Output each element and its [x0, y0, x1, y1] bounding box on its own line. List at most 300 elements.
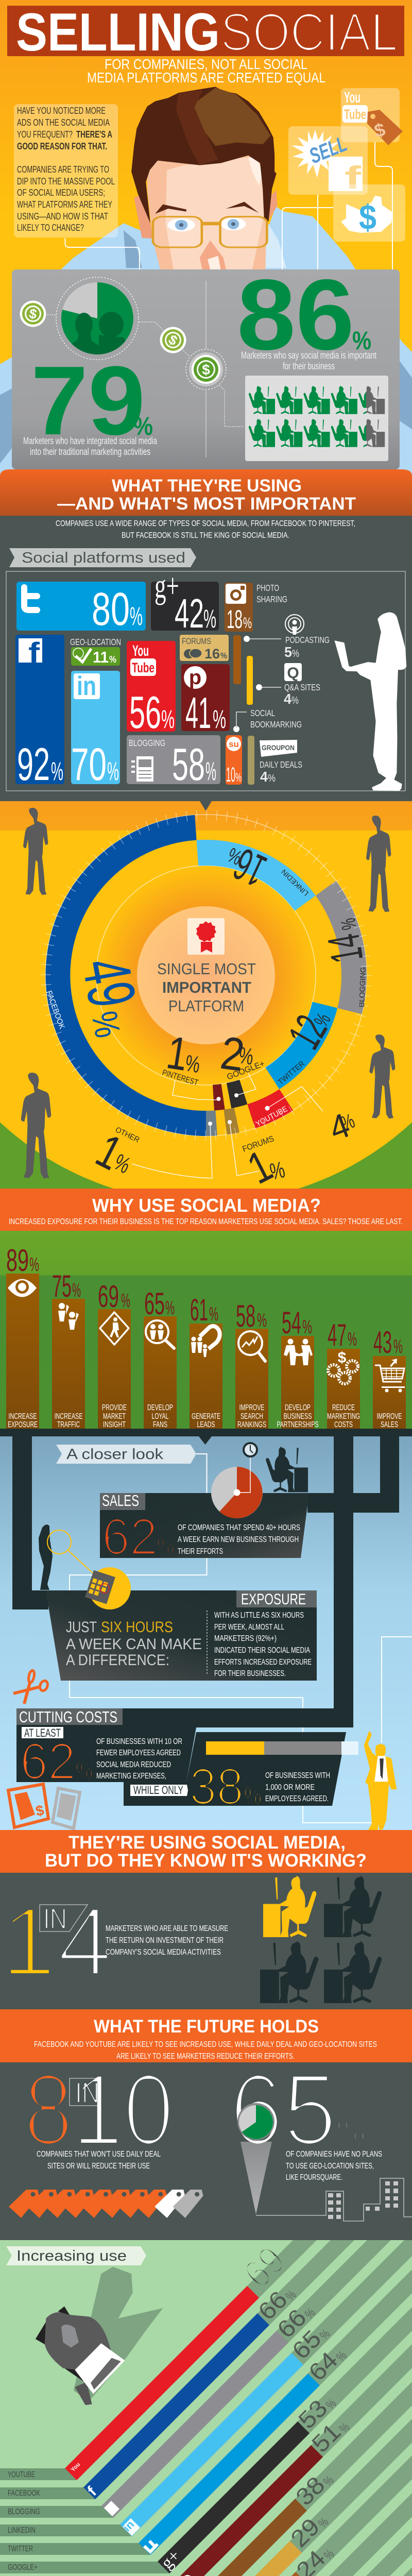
- text: sales: OF COMPANIES THAT SPEND 40+ HOURS: [178, 1523, 300, 1532]
- icon: YouTube price tag: Tube: [344, 107, 366, 122]
- value: forums 1 percent: %: [267, 1156, 287, 1185]
- stat: 86 percent: %: [352, 326, 371, 355]
- headline: six hours: SIX HOURS: [101, 1619, 173, 1636]
- row: Pinterest 51 percent: %: [336, 2420, 353, 2436]
- bar: increase traffic 75 percent: [52, 1269, 85, 1429]
- stat: 62 percent small businesses: 62: [20, 1733, 76, 1790]
- tile: Facebook: [15, 635, 64, 790]
- value: Facebook 49 percent: %: [84, 1008, 128, 1041]
- text: large businesses: EMPLOYEES AGREED.: [265, 1794, 329, 1803]
- text: geo-location: [286, 2150, 382, 2182]
- value: Google plus 2 percent: [217, 1027, 266, 1082]
- row: Twitter 64 percent: [0, 2346, 350, 2555]
- stat: 8 in 10: [24, 2053, 174, 2166]
- value: LinkedIn 16 percent: 16: [226, 839, 273, 897]
- row: YouTube 69 percent: %: [278, 2238, 304, 2264]
- row: Twitter 64 percent: 64: [303, 2346, 343, 2386]
- panel: cutting costs: [16, 1708, 353, 1790]
- row: Facebook 66 percent: f: [84, 2483, 100, 2499]
- icon: coin centre: [186, 349, 226, 389]
- tile: Facebook: %: [51, 757, 63, 786]
- text: return on investment: MARKETERS WHO ARE ABLE TO MEASURE: [106, 1924, 228, 1933]
- value: other 1 percent: OTHER: [114, 1125, 141, 1145]
- section header: what they're using: [0, 469, 412, 516]
- section header: what they're using: —AND WHAT'S MOST IMPORTANT: [57, 494, 356, 514]
- chart: platform increase bars: [0, 2237, 365, 2576]
- section header: are they measuring: THEY'RE USING SOCIAL MEDIA,: [68, 1833, 346, 1853]
- panel: large businesses: [124, 1732, 358, 1816]
- callout: social bookmarking: [233, 708, 302, 732]
- value: other 1 percent: %: [110, 1148, 135, 1179]
- value: blogging 14 percent: %: [337, 917, 361, 931]
- segment: Google plus: [227, 1080, 247, 1108]
- bar: increase exposure 89 percent: 89: [6, 1243, 29, 1278]
- bar: loyal fans 65 percent: LOYAL: [151, 1412, 169, 1421]
- text: exposure: WITH AS LITTLE AS SIX HOURS: [214, 1611, 304, 1620]
- icon: YouTube price tag: [341, 88, 403, 145]
- panel: exposure: [46, 1567, 317, 1681]
- value: other 1 percent: 1: [88, 1124, 130, 1180]
- bar: search rankings 58 percent: RANKINGS: [237, 1420, 266, 1429]
- value: Twitter 12 percent: %: [310, 1009, 335, 1030]
- stat: 62 percent small businesses: %: [76, 1757, 93, 1785]
- stat: 86 percent: 86: [237, 259, 354, 371]
- callout: podcasting: %: [292, 648, 299, 659]
- tile: YouTube: You: [132, 642, 149, 659]
- tile: LinkedIn: in: [77, 671, 96, 701]
- tile: geo-location: GEO-LOCATION: [70, 637, 121, 647]
- connector lines: intro: [65, 142, 392, 269]
- silhouette: woman with laptop: [334, 612, 406, 791]
- value: Twitter 12 percent: [277, 1007, 337, 1087]
- tile: Twitter: 80: [92, 584, 130, 635]
- tile: Google plus: %: [203, 604, 216, 633]
- bar: search rankings 58 percent: 58: [236, 1299, 255, 1333]
- callout: Q and A sites: Q: [287, 665, 299, 682]
- tile: Pinterest: p: [189, 666, 201, 689]
- pictogram: one in four marketers: [260, 1876, 382, 2003]
- tile: blogging: BLOGGING: [129, 738, 165, 748]
- tile: YouTube: [127, 641, 176, 738]
- text block: intro question: USING—AND HOW IS THAT: [17, 211, 108, 222]
- tag: sales: SALES: [102, 1492, 139, 1510]
- bar: improve sales 43 percent: SALES: [381, 1420, 398, 1429]
- chart: 79 percent pie: [56, 277, 139, 361]
- tile: photo sharing: 18: [227, 605, 243, 634]
- panel: 1 in 4: [0, 1873, 412, 2009]
- row: Pinterest 51 percent: [180, 2423, 349, 2576]
- stat: 62 percent of companies: 62: [102, 1508, 158, 1566]
- row: YouTube 69 percent: You: [70, 2462, 81, 2473]
- tile: forums: %: [220, 651, 227, 660]
- people silhouettes around chart: [21, 808, 395, 1178]
- bar: market insight 69 percent: [98, 1279, 131, 1429]
- segment: blogging: [316, 881, 367, 1014]
- segment: Pinterest: [213, 1084, 225, 1111]
- text: return on investment: THE RETURN ON INVESTMENT OF THEIR: [106, 1936, 224, 1945]
- tile: LinkedIn: %: [107, 757, 119, 786]
- bar: increase exposure 89 percent: EXPOSURE: [8, 1420, 38, 1429]
- callout: Q and A sites: [247, 656, 320, 707]
- stat: 38 percent: %: [244, 1783, 262, 1810]
- value: Twitter 12 percent: 12: [279, 1007, 337, 1057]
- text block: intro question: YOU FREQUENT?: [17, 129, 73, 140]
- value: YouTube label and 4 percent: [254, 1105, 358, 1148]
- callout: daily deals: %: [268, 773, 276, 784]
- row: forums 29 percent: %: [315, 2515, 332, 2531]
- callout: Q and A sites: 4: [284, 691, 291, 707]
- stat: 65 percent: %: [337, 2108, 365, 2154]
- section header: are they measuring: BUT DO THEY KNOW IT'S WORKING?: [45, 1851, 367, 1871]
- value: Facebook 49 percent: FACEBOOK: [44, 990, 66, 1030]
- tile: Google plus: [151, 566, 219, 636]
- icon: clock: [244, 1443, 257, 1456]
- icon: shrinking money frames: [8, 1784, 80, 1828]
- map pin beam: [241, 2142, 272, 2214]
- section background: intro: [0, 0, 412, 479]
- headline: six hours: JUST: [66, 1619, 97, 1636]
- stat: 62 percent of companies: %: [157, 1533, 174, 1560]
- illustration: city skyline: [256, 2178, 412, 2221]
- tile: Google plus: 42: [175, 590, 204, 636]
- text: exposure: INDICATED THEIR SOCIAL MEDIA: [214, 1646, 310, 1655]
- row: Google plus 53 percent: 53: [293, 2394, 333, 2434]
- text: exposure: FOR THEIR BUSINESSES.: [214, 1669, 286, 1678]
- tag: while only: WHILE ONLY: [133, 1784, 183, 1797]
- section header: what the future holds: WHAT THE FUTURE HOLDS: [94, 2016, 319, 2037]
- stat: 1 in 4: IN: [43, 1902, 67, 1935]
- tile: StumbleUpon: [226, 735, 242, 786]
- callout: social bookmarking: BOOKMARKING: [250, 719, 302, 730]
- tile: StumbleUpon: 10: [226, 764, 235, 786]
- chart centre: [137, 906, 275, 1044]
- chart centre: PLATFORM: [168, 997, 244, 1015]
- text block: intro question: DIP INTO THE MASSIVE POOL: [17, 176, 115, 187]
- connector lines: closer look: [70, 1454, 412, 1823]
- title banner: SOCIAL: [220, 3, 398, 62]
- tile: YouTube: 56: [129, 687, 161, 738]
- bar: generate leads 61 percent: GENERATE: [192, 1412, 220, 1421]
- callout: Q and A sites: Q&A SITES: [284, 682, 320, 692]
- figure: yellow businessman: [364, 1731, 397, 1831]
- text: return on investment: [106, 1924, 228, 1957]
- stat: 1 in 4: 4: [58, 1887, 112, 1996]
- value: blogging 14 percent: 14: [318, 930, 373, 967]
- bar: market insight 69 percent: %: [121, 1290, 130, 1311]
- row: photo sharing 38 percent: [218, 2476, 334, 2576]
- progress bar: 38 percent: [206, 1741, 358, 1755]
- bar: search rankings 58 percent: %: [257, 1310, 267, 1331]
- bar: market insight 69 percent: MARKET: [103, 1412, 126, 1421]
- value: Pinterest 1 percent: %: [183, 1050, 202, 1078]
- text block: intro question: THERE'S A: [76, 129, 112, 140]
- text: geo-location: TO USE GEO-LOCATION SITES,: [286, 2162, 374, 2171]
- segment: forums: [224, 1108, 239, 1134]
- bar: reduce marketing costs 47 percent: 47: [328, 1318, 347, 1352]
- bar: loyal fans 65 percent: 65: [144, 1286, 165, 1321]
- tile: photo sharing: PHOTO: [256, 583, 279, 593]
- tile: Facebook: f: [28, 636, 40, 669]
- bar: increase traffic 75 percent: TRAFFIC: [57, 1420, 80, 1429]
- row: LinkedIn 65 percent: in: [121, 2518, 136, 2534]
- value: Twitter 12 percent: TWITTER: [277, 1059, 306, 1087]
- bar: market insight 69 percent: 69: [98, 1279, 119, 1314]
- donut chart: single most important platform: [44, 815, 373, 1194]
- pictogram: price tags: [9, 2190, 203, 2218]
- text: daily deals: COMPANIES THAT WON'T USE DAILY DEAL: [37, 2150, 161, 2159]
- bar: increase traffic 75 percent: INCREASE: [55, 1412, 82, 1421]
- tile: Facebook: 92: [17, 738, 50, 790]
- tile: blogging: 58: [172, 739, 205, 790]
- tag: exposure: EXPOSURE: [241, 1591, 306, 1608]
- text block: intro question: COMPANIES ARE TRYING TO: [17, 164, 109, 175]
- chart: sales pie: [211, 1457, 263, 1518]
- ribbon: social platforms used: Social platforms used: [22, 550, 185, 566]
- text: exposure: [214, 1611, 312, 1678]
- value: forums 1 percent: FORUMS: [242, 1134, 276, 1154]
- icon: coin left: [20, 301, 46, 327]
- bar: reduce marketing costs 47 percent: MARKETING: [327, 1412, 360, 1421]
- row: Google plus 53 percent: g+: [157, 2546, 184, 2573]
- segment markers: [208, 1093, 270, 1126]
- text: daily deals: [37, 2150, 161, 2171]
- icon: Twitter bird with dollar: [333, 184, 405, 242]
- tile: forums: FORUMS: [182, 637, 211, 646]
- row: blogging 66 percent: 66: [272, 2303, 312, 2343]
- bar: increase exposure 89 percent: INCREASE: [8, 1412, 37, 1421]
- subtitle: FOR COMPANIES, NOT ALL SOCIAL: [105, 56, 307, 72]
- caption: 86 percent: [241, 350, 377, 372]
- chart: 65 percent pie: [237, 2103, 274, 2140]
- section background: a closer look: [0, 1429, 412, 1830]
- stat: 8 in 10: 10: [72, 2053, 174, 2166]
- section: social platforms used: [0, 516, 412, 801]
- text: sales: A WEEK EARN NEW BUSINESS THROUGH: [178, 1535, 299, 1544]
- bar: market insight 69 percent: INSIGHT: [103, 1420, 126, 1429]
- text block: intro question: OF SOCIAL MEDIA USERS;: [17, 188, 105, 198]
- bar: loyal fans 65 percent: %: [165, 1297, 175, 1318]
- intro text: platforms: [56, 519, 355, 540]
- text: large businesses: 1,000 OR MORE: [265, 1783, 315, 1792]
- callout: podcasting: [233, 615, 330, 684]
- illustration: overhead man with laptop: [36, 2267, 163, 2405]
- pictogram: marketers at desks: [245, 376, 388, 461]
- segment: YouTube: [247, 1089, 293, 1128]
- text: small businesses: SOCIAL MEDIA REDUCED: [96, 1760, 171, 1769]
- tile: forums: [180, 635, 229, 662]
- row: Twitter 64 percent: %: [333, 2348, 350, 2364]
- bar: search rankings 58 percent: IMPROVE: [239, 1403, 265, 1412]
- stat: 79 percent: 79: [31, 346, 145, 455]
- text: small businesses: MARKETING EXPENSES,: [96, 1772, 166, 1781]
- tile: Pinterest: %: [213, 705, 226, 734]
- tile: photo sharing: %: [243, 615, 252, 632]
- caption: 79 percent: into their traditional marketing activities: [30, 447, 150, 457]
- icon: scissors: [13, 1670, 49, 1704]
- headline: six hours: A DIFFERENCE:: [66, 1652, 169, 1669]
- stat: 8 in 10: 8: [24, 2053, 73, 2166]
- callout: Q and A sites: %: [291, 695, 299, 706]
- value: blogging 14 percent: [318, 917, 373, 1007]
- bar: loyal fans 65 percent: DEVELOP: [147, 1403, 173, 1412]
- row: Twitter 64 percent: TWITTER: [8, 2545, 33, 2553]
- segment: Twitter: [265, 1002, 337, 1089]
- notch arrow: [200, 801, 212, 811]
- section header: what the future holds: ARE LIKELY TO SEE MARKETERS REDUCE THEIR EFFORTS.: [116, 2052, 295, 2061]
- text block: intro question: [14, 104, 118, 238]
- bar: increase traffic 75 percent: %: [72, 1280, 81, 1301]
- bar: business partnerships 54 percent: 54: [282, 1306, 301, 1340]
- tile: StumbleUpon: su: [229, 739, 239, 749]
- subtitle: [87, 56, 325, 86]
- text: geo-location: LIKE FOURSQUARE.: [286, 2173, 342, 2182]
- row: podcasting 24 percent: %: [321, 2547, 337, 2563]
- bar: loyal fans 65 percent: FANS: [153, 1420, 167, 1429]
- bar chart: reasons for using social media: [0, 1231, 412, 1429]
- notch arrow: [199, 1436, 212, 1445]
- row: YouTube 69 percent: 69: [234, 2237, 294, 2297]
- stat: 1 in 4: [2, 1887, 112, 1996]
- chart centre: SINGLE MOST: [157, 960, 256, 978]
- value: LinkedIn 16 percent: LINKEDIN: [280, 868, 310, 897]
- tile: geo-location: 11: [93, 648, 109, 666]
- bar: loyal fans 65 percent: [144, 1286, 177, 1429]
- icon: shrinking money frames: $: [34, 1802, 45, 1819]
- icon: coin middle: [160, 327, 186, 353]
- row: forums 29 percent: [255, 2518, 329, 2576]
- callout: podcasting: 5: [284, 644, 292, 660]
- tile: Twitter: %: [130, 602, 143, 631]
- icon: man at desk: [266, 1447, 308, 1492]
- row: Google plus 53 percent: [0, 2394, 339, 2573]
- row: LinkedIn 65 percent: %: [317, 2327, 333, 2343]
- icon: sell burst with Facebook: SELL: [306, 131, 350, 168]
- section header: why use social media: [0, 1189, 412, 1231]
- title banner: SELLING: [16, 3, 220, 62]
- caption: 79 percent: [23, 436, 157, 457]
- bar: reduce marketing costs 47 percent: $: [338, 1349, 347, 1366]
- section background: most important platform: [0, 801, 412, 1189]
- callout: daily deals: GROUPON: [262, 743, 295, 752]
- row: Google plus 53 percent: %: [323, 2396, 339, 2412]
- tile: Pinterest: [181, 664, 230, 738]
- caption: 79 percent: Marketers who have integrated social media: [23, 436, 157, 447]
- value: Pinterest 1 percent: PINTEREST: [161, 1069, 199, 1088]
- text block: intro question: HAVE YOU NOTICED MORE: [17, 106, 106, 116]
- icon: Twitter bird with dollar: $: [359, 198, 376, 237]
- text block: intro question: ADS ON THE SOCIAL MEDIA: [17, 117, 110, 128]
- row: photo sharing 38 percent: %: [320, 2473, 337, 2489]
- icon: YouTube price tag: You: [344, 89, 360, 106]
- section header: why use social media: WHY USE SOCIAL MEDIA?: [92, 1195, 321, 1216]
- row: blogging 66 percent: %: [302, 2306, 318, 2321]
- bar: generate leads 61 percent: [190, 1293, 222, 1429]
- text: sales: [178, 1523, 300, 1556]
- tile: Pinterest: 41: [185, 689, 211, 738]
- tile: Twitter: [16, 582, 146, 635]
- bar: reduce marketing costs 47 percent: [327, 1318, 360, 1429]
- tile: YouTube: Tube: [132, 660, 154, 675]
- text: exposure: MARKETERS (92%+): [214, 1634, 277, 1643]
- bar: generate leads 61 percent: 61: [190, 1293, 208, 1327]
- bar: increase traffic 75 percent: 75: [52, 1269, 72, 1303]
- text: return on investment: COMPANY'S SOCIAL MEDIA ACTIVITIES: [106, 1948, 221, 1957]
- icon: YouTube price tag: $: [372, 118, 387, 142]
- row: photo sharing 38 percent: 38: [290, 2471, 330, 2511]
- tile: LinkedIn: 70: [71, 738, 107, 790]
- tile: geo-location: [70, 637, 121, 666]
- text: daily deals: SITES OR WILL REDUCE THEIR USE: [47, 2162, 150, 2171]
- row: YouTube 69 percent: [0, 2237, 304, 2480]
- tile: blogging: %: [205, 757, 216, 786]
- value: Google plus 2 percent: GOOGLE+: [226, 1059, 266, 1082]
- value: YouTube label and 4 percent: YOUTUBE: [254, 1105, 289, 1129]
- bar: increase exposure 89 percent: [6, 1243, 39, 1429]
- row: Facebook 66 percent: [0, 2285, 299, 2499]
- icon: coin left: $: [28, 306, 38, 322]
- section header: what they're using: WHAT THEY'RE USING: [112, 476, 302, 496]
- subtitle: MEDIA PLATFORMS ARE CREATED EQUAL: [87, 70, 325, 86]
- text: small businesses: OF BUSINESSES WITH 10 OR: [96, 1737, 182, 1746]
- icon: sell burst with Facebook: [288, 126, 368, 196]
- bar: reduce marketing costs 47 percent: %: [348, 1329, 357, 1350]
- icon: sell burst with Facebook: f: [345, 160, 362, 196]
- row: Facebook 66 percent: FACEBOOK: [8, 2489, 40, 2498]
- bar: reduce marketing costs 47 percent: REDUCE: [332, 1403, 355, 1412]
- tile: LinkedIn: [71, 671, 120, 790]
- value: blogging 14 percent: BLOGGING: [357, 967, 367, 1007]
- caption: 86 percent: for their business: [283, 361, 335, 372]
- icon: calendar: [85, 1567, 131, 1609]
- section header: are they measuring: [0, 1830, 412, 1873]
- tile: Google plus: g+: [154, 566, 179, 605]
- tile: photo sharing: SHARING: [256, 594, 287, 604]
- title banner: [7, 3, 404, 62]
- tile: StumbleUpon: %: [235, 771, 242, 785]
- callout: daily deals: DAILY DEALS: [260, 759, 302, 770]
- row: YouTube 69 percent: YOUTUBE: [8, 2470, 35, 2479]
- icon: coin centre: $: [202, 362, 210, 378]
- bar: generate leads 61 percent: LEADS: [197, 1420, 215, 1429]
- connector lines: small segments: [132, 1073, 323, 1178]
- tile: forums: 16: [204, 646, 220, 662]
- tag: at least: AT LEAST: [24, 1726, 61, 1739]
- row: Google plus 53 percent: GOOGLE+: [8, 2563, 38, 2572]
- bar: improve sales 43 percent: %: [393, 1336, 403, 1357]
- stat: 38 percent: 38: [190, 1758, 244, 1816]
- value: Pinterest 1 percent: 1: [163, 1027, 192, 1081]
- bar: increase exposure 89 percent: %: [29, 1254, 39, 1275]
- panel: marketer statistics: [12, 259, 400, 469]
- text block: intro question: LIKELY TO CHANGE?: [17, 223, 84, 233]
- tile: YouTube: %: [161, 705, 175, 734]
- ribbon: increasing use: Increasing use: [16, 2248, 127, 2264]
- row: Facebook 66 percent: %: [283, 2287, 299, 2303]
- bar: improve sales 43 percent: 43: [373, 1325, 392, 1360]
- silhouette: woman with magnifier: [39, 1524, 94, 1590]
- diagonal background stripes: [65, 2240, 412, 2576]
- value: YouTube label and 4 percent: 4: [324, 1106, 355, 1148]
- segment: other: [206, 1110, 217, 1136]
- text: small businesses: [96, 1737, 182, 1781]
- text block: intro question: WHAT PLATFORMS ARE THEY: [17, 199, 112, 210]
- ribbon: a closer look: [56, 1445, 196, 1464]
- value: LinkedIn 16 percent: %: [225, 843, 246, 869]
- bar: business partnerships 54 percent: BUSINESS: [283, 1412, 312, 1421]
- bar: business partnerships 54 percent: DEVELOP: [285, 1403, 311, 1412]
- callout: social bookmarking: SOCIAL: [250, 708, 275, 718]
- text: large businesses: [265, 1771, 330, 1803]
